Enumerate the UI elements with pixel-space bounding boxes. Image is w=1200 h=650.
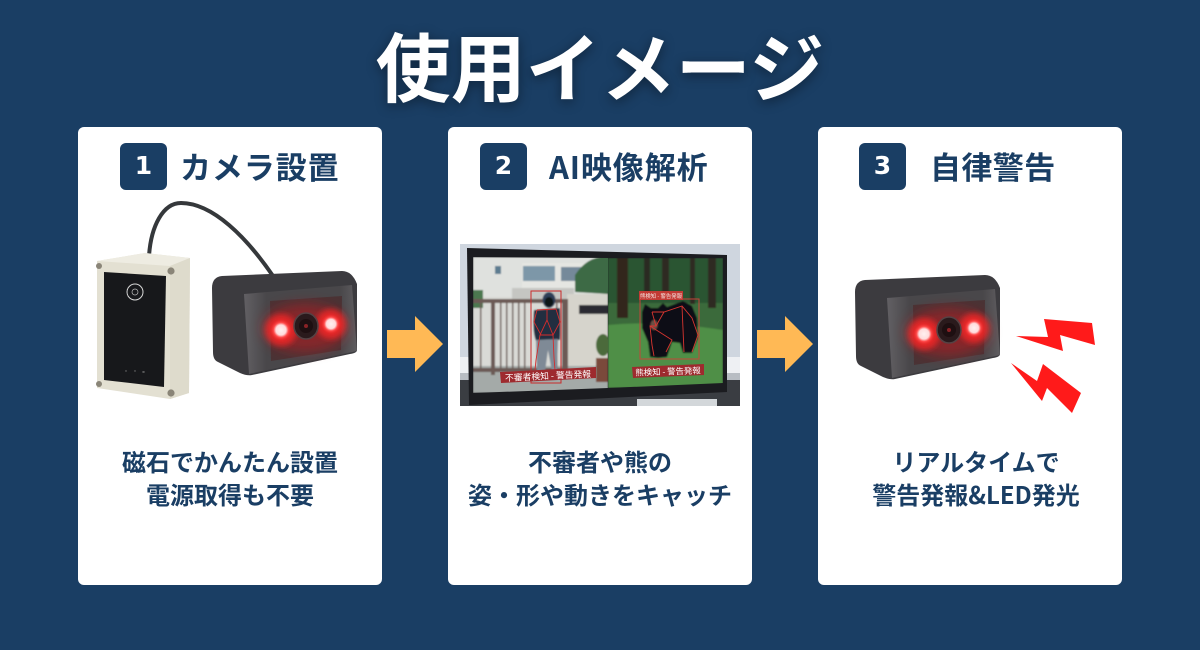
power icon xyxy=(127,284,143,300)
bear xyxy=(642,301,698,358)
step badge 3 xyxy=(859,143,906,190)
bear detection boxes xyxy=(640,299,699,359)
label: intruder alert: 不審者検知 - 警告発報 xyxy=(505,367,592,384)
left scene: person at gate xyxy=(473,257,615,393)
room background xyxy=(460,244,740,406)
arrow 1 xyxy=(387,316,443,372)
text: alert description xyxy=(872,443,1080,511)
title: 使用イメージ xyxy=(376,9,824,118)
heading: autonomous alert: 自律警告 xyxy=(930,143,1056,188)
icon: controller box with cable xyxy=(96,203,273,399)
box body xyxy=(97,253,190,399)
screws xyxy=(96,263,102,269)
black panel xyxy=(104,272,166,387)
indicator dots xyxy=(125,370,145,373)
text: AI analysis description: 姿・形や動きをキャッチ xyxy=(468,476,732,511)
arrow 2 xyxy=(757,316,813,372)
panel: autonomous alert xyxy=(818,127,1122,585)
icon: lightning bolt lower xyxy=(1011,363,1081,413)
text: camera installation description: 電源取得も不要 xyxy=(146,476,314,511)
bear skeleton xyxy=(650,306,698,356)
step badge 1 xyxy=(120,143,167,190)
person skeleton xyxy=(534,309,560,370)
label: bear alert: 熊検知 - 警告発報 xyxy=(635,364,701,379)
heading: camera installation: カメラ設置 xyxy=(180,143,340,188)
text: AI analysis description xyxy=(468,443,732,511)
step badge 2 xyxy=(480,143,527,190)
text: AI analysis description: 不審者や熊の xyxy=(528,443,672,478)
text: alert description: 警告発報&LED発光 xyxy=(872,476,1080,511)
text: camera installation description: 磁石でかんたん設置 xyxy=(122,443,338,478)
icon: lightning bolt upper xyxy=(1016,319,1095,351)
heading: AI video analysis: AI映像解析 xyxy=(549,143,709,188)
gate xyxy=(473,299,568,375)
cable xyxy=(149,203,273,276)
label: small bear tag: 熊検知 - 警告発報 xyxy=(640,292,683,300)
person detection box xyxy=(531,291,561,383)
icon: camera with red LEDs, alert step xyxy=(855,275,1000,379)
step badge 1: 1 xyxy=(135,151,152,180)
image: monitor with detection views xyxy=(460,244,740,406)
text: camera installation description xyxy=(122,443,338,511)
monitor bezel xyxy=(467,248,727,405)
text: alert description: リアルタイムで xyxy=(892,443,1060,478)
step badge 3: 3 xyxy=(874,151,891,180)
step badge 2: 2 xyxy=(495,151,512,180)
panel: AI video analysis xyxy=(448,127,752,585)
icon: camera with red LEDs xyxy=(212,271,357,375)
person xyxy=(542,292,556,308)
right scene: bear in forest xyxy=(608,258,723,388)
panel: camera installation xyxy=(78,127,382,585)
